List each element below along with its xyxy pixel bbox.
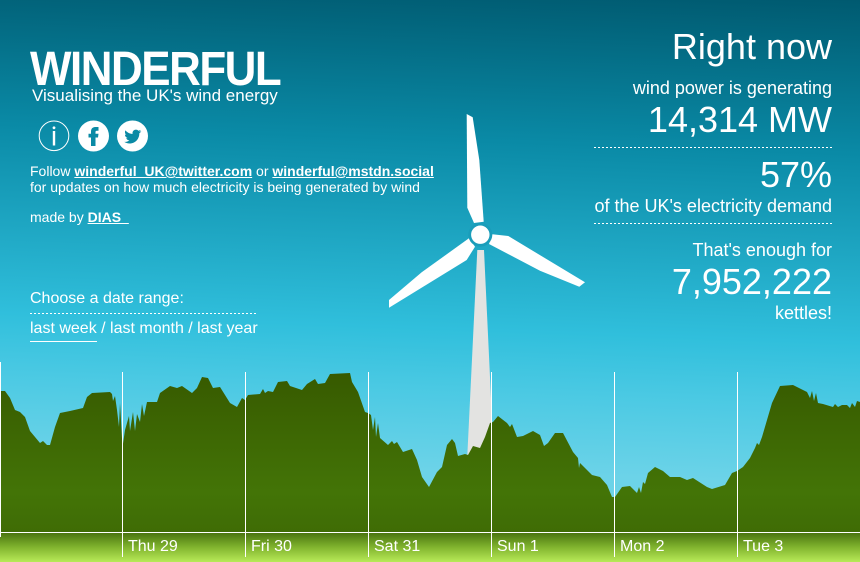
date labels: Tue 3 — [743, 538, 783, 555]
date range chooser: Choose a date range: — [30, 290, 184, 307]
follow text — [30, 163, 434, 195]
icon: twitter — [117, 120, 148, 152]
demand label: of the UK's electricity demand — [594, 196, 832, 216]
date range chooser: last week / last month / last year — [30, 320, 258, 337]
follow text: Follow winderful_UK@twitter.com or winderful@mstdn.social — [30, 163, 434, 179]
date labels: Sat 31 — [374, 538, 420, 555]
date labels — [128, 538, 783, 555]
date range chooser — [30, 290, 258, 342]
subtitle: Visualising the UK's wind energy — [32, 86, 278, 105]
icon: info — [38, 120, 70, 152]
date labels: Thu 29 — [128, 538, 178, 555]
credit: made by DIAS — [30, 209, 121, 225]
title: WINDERFUL — [30, 43, 280, 96]
date labels: Mon 2 — [620, 538, 664, 555]
panel: right now stats — [594, 26, 832, 323]
icon: facebook — [78, 120, 109, 152]
date labels: Sun 1 — [497, 538, 539, 555]
demand percent: 57% — [760, 154, 832, 195]
kettles label: That's enough for — [692, 240, 832, 260]
heading: Right now — [672, 26, 832, 67]
follow text: for updates on how much electricity is being generated by wind — [30, 179, 420, 195]
date labels: Fri 30 — [251, 538, 292, 555]
kettles caption: kettles! — [775, 303, 832, 323]
kettles value: 7,952,222 — [672, 261, 832, 302]
wind power label: wind power is generating — [633, 78, 832, 98]
wind power value: 14,314 MW — [648, 99, 832, 140]
